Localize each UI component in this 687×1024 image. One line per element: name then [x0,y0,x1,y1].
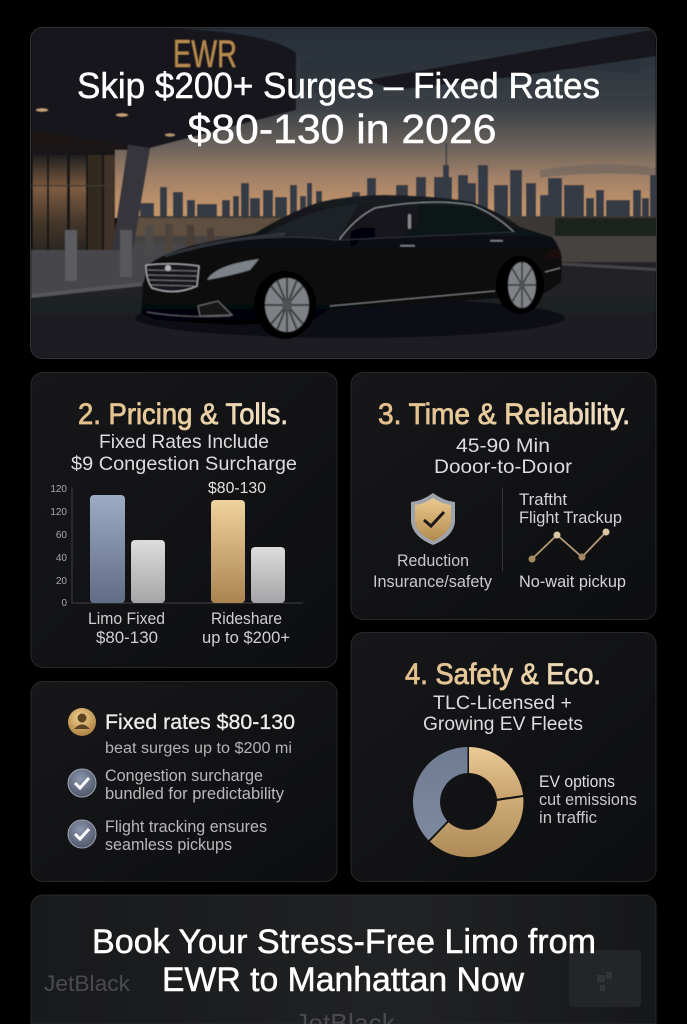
bar chart: Rideshare [211,610,282,628]
pickup label: No-wait pickup [519,573,626,591]
bar chart: $80-130 [208,480,266,497]
panel: safety and eco [351,632,656,882]
panel: key benefits [31,682,337,882]
donut caption: EV options [539,773,615,791]
flight tracking label: Traftht [519,491,567,509]
subheading: safety: Growing EV Fleets [423,713,583,735]
watermark: logo left: JetBlack [44,971,131,996]
subheading: safety [423,692,583,735]
limousine [135,195,565,339]
subheading: safety: TLC-Licensed + [433,692,572,714]
bar chart: 20 [56,576,67,587]
panel: time and reliability [351,372,656,620]
rear wheel [496,256,544,314]
heading: time: 3. Time & Reliability. [378,398,630,431]
front wheel [254,271,316,339]
bar chart: 60 [56,530,67,541]
benefit: fixed rates: beat surges up to $200 mi [105,740,292,757]
donut caption [539,773,637,827]
line chart icon [528,528,610,562]
call to action text: Book Your Stress-Free Limo from [92,923,596,961]
subheading: pricing: $9 Congestion Surcharge [71,453,297,475]
benefit: flight tracking: Flight tracking ensures [105,818,267,836]
bar chart: up to $200+ [202,629,290,647]
heading: pricing: 2. Pricing & Tolls. [78,398,288,431]
benefit: congestion surcharge: bundled for predictability [105,785,285,803]
watermark: logo square [569,950,641,1007]
hero title [77,65,600,152]
subheading: pricing: Fixed Rates Include [99,431,269,453]
benefit: flight tracking [105,818,267,854]
heading: safety: 4. Safety & Eco. [405,658,601,691]
bollards [65,224,214,281]
bar chart: $80-130 [96,629,158,647]
icon: check [68,820,96,848]
donut caption: in traffic [539,809,597,827]
bar chart: 120 [50,507,67,518]
bar chart: 0 [61,598,67,609]
airport sign: EWR [173,33,237,76]
subheading: pricing [71,431,297,475]
donut chart [413,747,523,857]
safety label [373,552,493,591]
panel: pricing and tolls [31,372,337,668]
panel: call to action [31,895,656,1024]
subheading: time [434,435,573,478]
flight tracking label: Flight Trackup [519,509,622,527]
bar chart: Limo Fixed [88,610,165,628]
panel: hero photo [30,28,657,358]
donut caption: cut emissions [539,791,637,809]
benefit: flight tracking: seamless pickups [105,836,232,854]
icon: gold coin [68,708,96,736]
safety label: Reduction [397,552,469,570]
bar chart [50,480,303,647]
benefit: fixed rates: Fixed rates $80-130 [105,711,295,734]
subheading: time: 45-90 Min [456,435,550,457]
safety label: Insurance/safety [373,573,493,591]
subheading: time: Dooor-to-Doıor [434,456,573,478]
icon: shield [411,493,455,545]
call to action text: EWR to Manhattan Now [162,961,524,999]
bar chart: 40 [56,553,67,564]
icon: check [68,769,96,797]
flight tracking label [519,491,622,527]
benefit: congestion surcharge [105,767,285,803]
hero title: $80-130 in 2026 [188,106,496,152]
bar chart: 120 [50,484,67,495]
call to action text [92,923,596,999]
benefit: congestion surcharge: Congestion surcharge [105,767,263,785]
benefit: fixed rates [105,711,295,757]
hero title: Skip $200+ Surges – Fixed Rates [77,65,600,106]
